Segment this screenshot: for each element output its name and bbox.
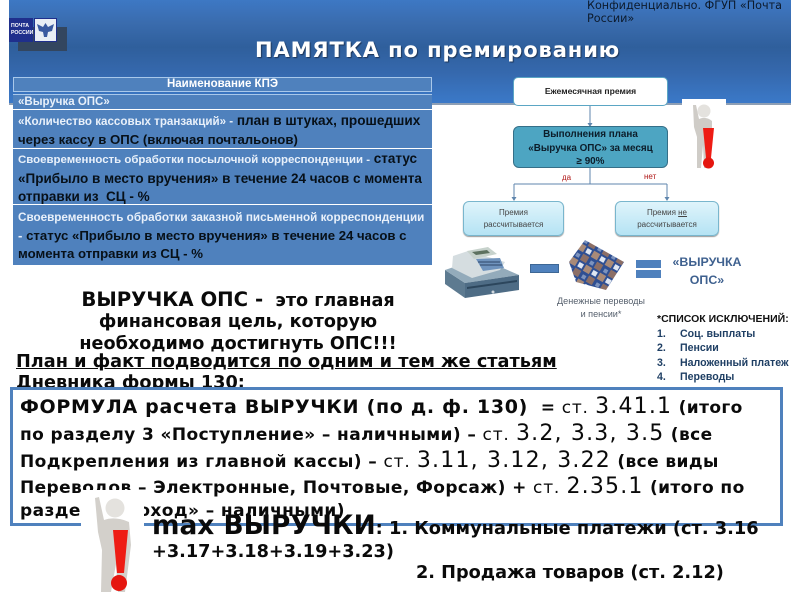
- connectors: [512, 106, 670, 201]
- figure: man with exclamation mark, top: [682, 99, 726, 168]
- title: ПАМЯТКА по премированию: [255, 38, 620, 62]
- exclusions items: 4.: [657, 371, 666, 383]
- plan and fact note: План и факт подводится по одним и тем же статьям: [16, 352, 557, 372]
- row: parcel timeliness: Своевременность обработки посылочной корреспонденции - статус: [18, 151, 417, 166]
- plan and fact note: [16, 352, 557, 393]
- row: registered mail timeliness: момента отправки из СЦ - %: [18, 246, 203, 261]
- exclusions heading: *СПИСОК ИСКЛЮЧЕНИЙ:: [657, 313, 789, 325]
- cash register icon: [445, 247, 519, 298]
- row: cash transactions: [13, 110, 432, 148]
- main goal statement: финансовая цель, которую: [99, 312, 377, 332]
- max revenue item two: 2. Продажа товаров (ст. 2.12): [416, 563, 724, 583]
- equals sign: [636, 260, 661, 278]
- exclusions items: 2.: [657, 342, 666, 354]
- caption: money transfers and pensions: Денежные переводы: [557, 296, 645, 306]
- row: revenue: [13, 94, 432, 109]
- box: monthly bonus: [513, 77, 668, 106]
- row: cash transactions: через кассу в ОПС (включая почтальонов): [18, 132, 298, 146]
- main goal statement: необходимо достигнуть ОПС!!!: [79, 334, 397, 354]
- exclusions list: [657, 312, 789, 383]
- confidentiality note: России»: [587, 12, 634, 25]
- table header row: Наименование КПЭ: [167, 78, 278, 90]
- row: registered mail timeliness: [13, 205, 432, 265]
- exclusions items: [657, 328, 788, 383]
- exclusions items: Пенсии: [680, 342, 719, 354]
- caption: money transfers and pensions: [557, 296, 645, 318]
- row: parcel timeliness: отправки из СЦ - %: [18, 189, 150, 204]
- label: revenue: [672, 255, 742, 287]
- exclusions items: Переводы: [680, 371, 734, 383]
- formula panel: Подкрепления из главной кассы) – ст. 3.11, 3.12, 3.22 (все виды: [20, 448, 719, 472]
- main goal statement: ВЫРУЧКА ОПС - это главная: [81, 288, 395, 310]
- formula panel: ФОРМУЛА расчета ВЫРУЧКИ (по д. ф. 130) = ст. 3.41.1 (итого: [20, 394, 743, 418]
- label: yes: да: [562, 173, 571, 182]
- logo: Почта России: РОССИИ: [11, 30, 33, 36]
- formula panel: разделу «Доход» – наличными): [20, 501, 345, 521]
- main goal statement: [79, 288, 397, 354]
- minus sign: [530, 264, 559, 273]
- box: bonus calculated: Премия: [499, 208, 528, 217]
- box: bonus not calculated: [615, 201, 719, 236]
- figure: man with exclamation mark, bottom: [81, 490, 144, 600]
- box: plan fulfilment: ≥ 90%: [577, 156, 604, 167]
- box: plan fulfilment: «Выручка ОПС» за месяц: [528, 142, 653, 154]
- label: no: нет: [644, 172, 656, 181]
- row: revenue: «Выручка ОПС»: [18, 96, 110, 108]
- formula panel: по разделу 3 «Поступление» – наличными) – ст. 3.2, 3.3, 3.5 (все: [20, 421, 713, 446]
- max revenue second line: +3.17+3.18+3.19+3.23): [152, 542, 394, 562]
- exclusions items: 1.: [657, 328, 666, 340]
- caption: money transfers and pensions: и пенсии*: [581, 308, 621, 318]
- box: bonus calculated: рассчитывается: [484, 220, 543, 229]
- exclusions items: Наложенный платеж: [680, 357, 788, 369]
- row: registered mail timeliness: - статус «Прибыло в место вручения» в течение 24 часов с: [18, 228, 407, 243]
- box: bonus not calculated: Премия не: [647, 208, 687, 217]
- box: plan fulfilment: [513, 126, 668, 168]
- exclusions items: 3.: [657, 357, 666, 369]
- formula panel: Переводов – Электронные, Почтовые, Форсаж) + ст. 2.35.1 (итого по: [20, 474, 745, 498]
- confidentiality note: [587, 0, 782, 25]
- max revenue heading: max ВЫРУЧКИ: 1. Коммунальные платежи (ст. 3.16: [152, 510, 759, 541]
- row: parcel timeliness: «Прибыло в место вручения» в течение 24 часов с момента: [18, 170, 422, 186]
- flowchart: [462, 77, 720, 238]
- cube of money transfers: [569, 240, 624, 290]
- box: bonus not calculated: рассчитывается: [637, 220, 697, 229]
- label: revenue: «ВЫРУЧКА: [672, 255, 742, 269]
- row: registered mail timeliness: Своевременность обработки заказной письменной корреспонденции: [18, 211, 424, 224]
- KPI table: [13, 77, 432, 265]
- formula panel: [10, 387, 783, 526]
- box: plan fulfilment: Выполнения плана: [543, 129, 638, 140]
- box: bonus calculated: [463, 201, 564, 236]
- box: monthly bonus: Ежемесячная премия: [545, 86, 636, 96]
- label: revenue: ОПС»: [690, 273, 724, 287]
- plan and fact note: Дневника формы 130:: [16, 373, 245, 393]
- logo: Почта России: ПОЧТА: [11, 23, 29, 29]
- logo: Почта России: [9, 18, 67, 51]
- row: cash transactions: «Количество кассовых транзакций» - план в штуках, прошедших: [18, 113, 420, 128]
- table header row: [13, 77, 432, 92]
- header band: [9, 0, 791, 105]
- exclusions items: Соц. выплаты: [680, 328, 755, 340]
- row: parcel timeliness: [13, 149, 432, 204]
